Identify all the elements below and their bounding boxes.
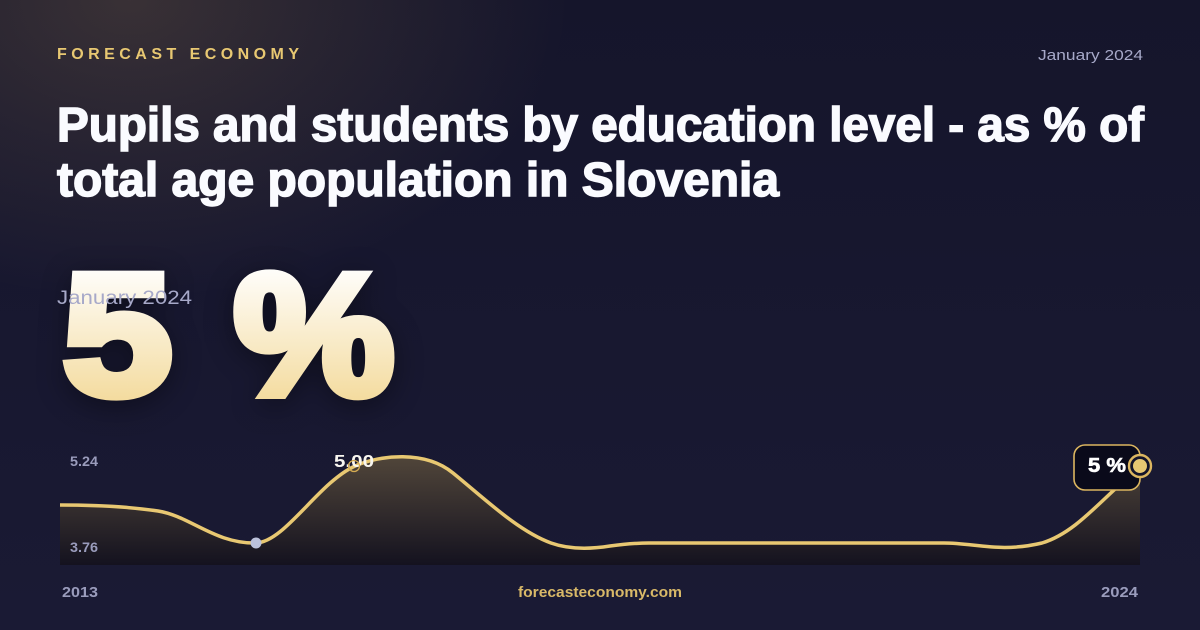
source site: forecasteconomy.com: [518, 585, 682, 601]
current value callout: 5 %: [1088, 455, 1126, 477]
x axis end year: 2024: [1101, 585, 1138, 601]
date: top right: January 2024: [1038, 47, 1143, 64]
title: [57, 99, 1145, 207]
axis min label: 3.76: [70, 540, 99, 555]
big value: 5 %: %: [234, 239, 394, 431]
current value callout: [1074, 445, 1140, 490]
date overlapping big value: January 2024: [57, 288, 192, 309]
peak marker ring: [348, 460, 360, 472]
peak value label: 5.00: [334, 451, 374, 471]
low point marker: [250, 538, 262, 548]
brand label: FORECAST ECONOMY: [57, 46, 299, 63]
big value: 5 %: 5: [63, 239, 172, 431]
title: total age population in Slovenia: [57, 154, 779, 207]
title: Pupils and students by education level - as % of: [57, 99, 1145, 152]
trend line: [60, 457, 1140, 548]
x axis start year: 2013: [62, 585, 98, 601]
area fill: [60, 457, 1140, 565]
axis max label: 5.24: [70, 454, 99, 469]
current point marker: [1129, 455, 1151, 477]
big value: 5 %: [63, 239, 394, 431]
area chart: [60, 457, 1140, 565]
